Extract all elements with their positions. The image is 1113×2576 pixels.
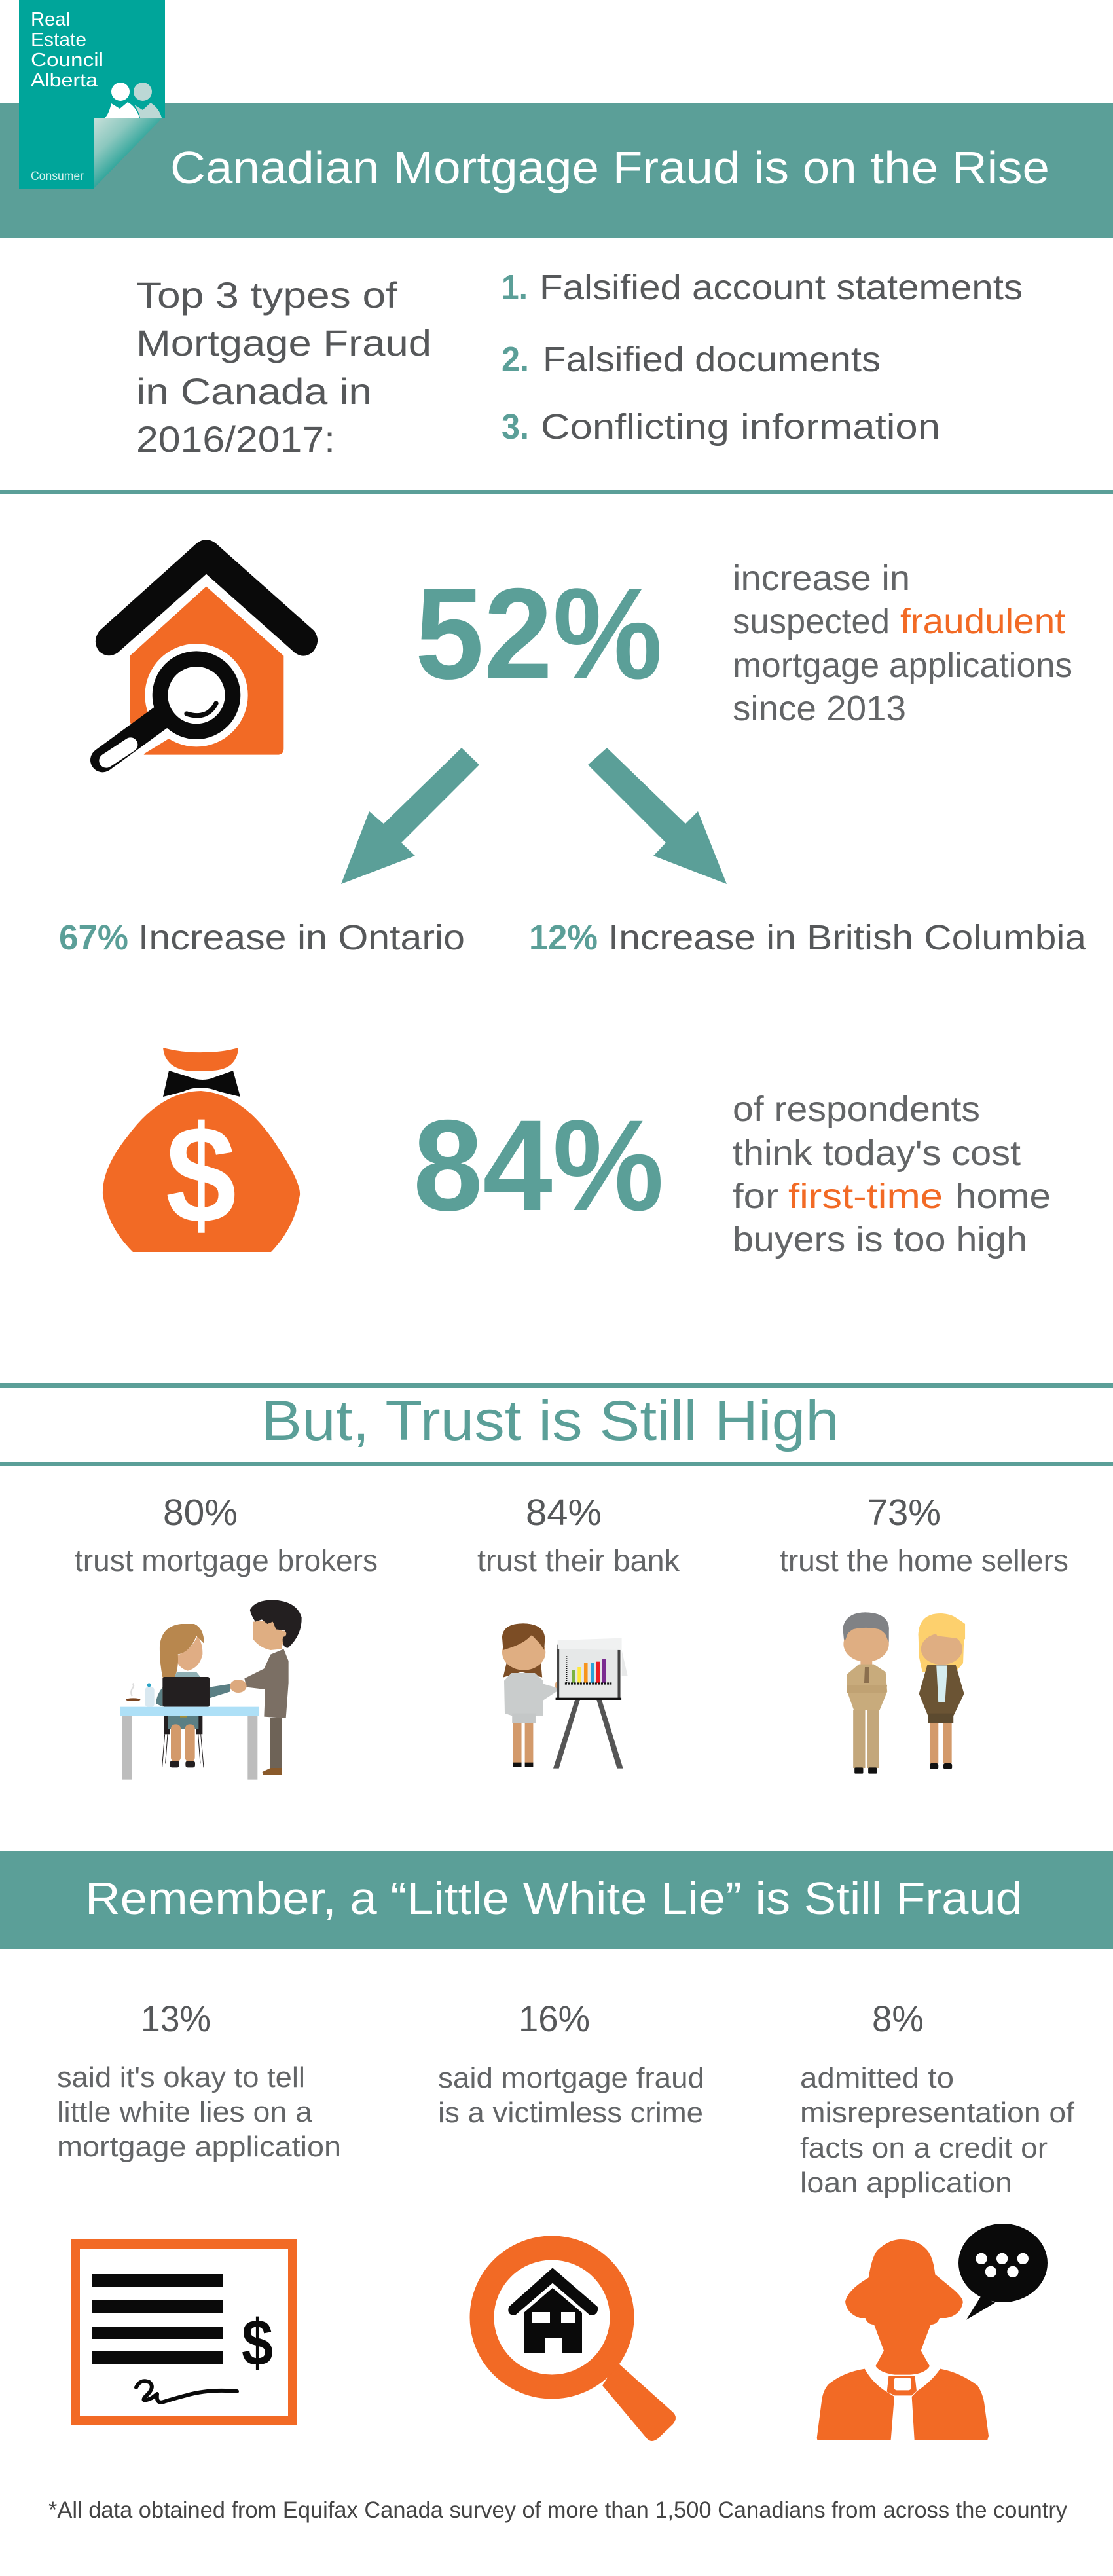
footnote: *All data obtained from Equifax Canada survey of more than 1,500 Canadians from across the country (48, 2497, 1067, 2523)
stat: 8% misrepresentation: loan application (800, 2167, 1012, 2199)
text: 52% description (733, 559, 1072, 728)
stat: trust the home sellers: trust the home sellers (780, 1543, 1068, 1577)
stat: 8% misrepresentation: facts on a credit or (800, 2132, 1048, 2164)
text block: top 3 types heading (136, 274, 431, 460)
logo: Real Estate Council Alberta: Estate (31, 29, 86, 50)
text: 52% description: fraudulent (900, 602, 1065, 641)
illustration: bank presenter with flip chart (502, 1623, 628, 1769)
stat: 52%: 52% (415, 561, 663, 706)
logo: Real Estate Council Alberta: Council (31, 50, 103, 71)
illustration: home sellers couple (843, 1612, 965, 1774)
stat: 8% misrepresentation: 8% (872, 1998, 924, 2039)
illustration: broker handshake at desk (120, 1600, 302, 1780)
text: 52% description: mortgage applications (733, 646, 1072, 685)
text: 84% description: of respondents (733, 1090, 980, 1129)
stat: 8% misrepresentation: admitted to (800, 2062, 954, 2094)
stat: trust their bank: 84% (526, 1492, 602, 1534)
stat: trust their bank (477, 1492, 680, 1577)
list: top 3 fraud types: 2. (502, 340, 529, 379)
stat: 84%: 84% (413, 1093, 664, 1238)
text block: top 3 types heading: Top 3 types of (136, 274, 397, 316)
icon: signed document (75, 2244, 293, 2421)
text: 84% description: home (955, 1177, 1051, 1216)
stat: 8% misrepresentation (800, 1998, 1075, 2199)
stat: trust their bank: trust their bank (477, 1543, 680, 1577)
stat: 16% victimless crime: said mortgage fraud (438, 2062, 704, 2094)
stat: trust the home sellers (780, 1492, 1068, 1577)
text block: top 3 types heading: in Canada in (136, 371, 372, 412)
list: top 3 fraud types: 1. (502, 268, 528, 307)
icon: signed document: $ (242, 2306, 273, 2380)
logo: Real Estate Council Alberta: Real (31, 9, 70, 30)
stat: 13% white lies: said it's okay to tell (57, 2061, 305, 2093)
text: 84% description: first-time (788, 1177, 943, 1216)
list: top 3 fraud types (502, 268, 1023, 447)
text: 84% description: think today's cost (733, 1133, 1021, 1173)
icon: money bag (103, 1048, 300, 1252)
stat: 13% white lies (57, 1998, 341, 2163)
stat: 13% white lies: 13% (141, 1998, 211, 2039)
arrow: to Ontario (341, 748, 479, 884)
arrow: to British Columbia (588, 748, 727, 884)
icon: money bag: $ (166, 1097, 236, 1252)
logo: Real Estate Council Alberta: Alberta (31, 70, 98, 91)
icon: house with magnifier (96, 540, 318, 761)
list: top 3 fraud types: 3. (502, 407, 529, 447)
header band (0, 103, 1113, 238)
logo: Real Estate Council Alberta (19, 0, 165, 189)
text block: top 3 types heading: Mortgage Fraud (136, 322, 431, 363)
icon: magnifying glass over house (482, 2248, 676, 2441)
stat: trust the home sellers: 73% (867, 1492, 941, 1534)
text: 52% description: increase in (733, 559, 910, 598)
logo: Real Estate Council Alberta: Consumer (31, 170, 84, 183)
stat: trust mortgage brokers: trust mortgage brokers (75, 1543, 378, 1577)
stat: 16% victimless crime: 16% (519, 1998, 590, 2039)
stat: 13% white lies: little white lies on a (57, 2096, 313, 2128)
stat: 13% white lies: mortgage application (57, 2131, 341, 2163)
text block: top 3 types heading: 2016/2017: (136, 418, 335, 460)
icon: person with speech bubble (817, 2224, 1048, 2440)
text: 84% description: for (733, 1177, 778, 1216)
heading: But, Trust is Still High: But, Trust is Still High (261, 1389, 839, 1452)
text: 52% description: suspected (733, 602, 890, 641)
stat: 16% victimless crime (438, 1998, 704, 2129)
stat: 12% British Columbia: 12% (529, 918, 598, 957)
stat: 8% misrepresentation: misrepresentation of (800, 2097, 1075, 2129)
title: Canadian Mortgage Fraud is on the Rise (170, 142, 1049, 193)
list: top 3 fraud types: Falsified documents (543, 340, 881, 379)
stat: 16% victimless crime: is a victimless crime (438, 2097, 703, 2129)
list: top 3 fraud types: Conflicting information (541, 407, 940, 447)
banner: Remember, a "Little White Lie" is Still Fraud: Remember, a “Little White Lie” is Still Fraud (85, 1873, 1023, 1924)
stat: 67% Ontario: 67% (59, 918, 128, 957)
stat: trust mortgage brokers (75, 1492, 378, 1577)
stat: 12% British Columbia: Increase in British Columbia (608, 918, 1087, 957)
stat: 67% Ontario: Increase in Ontario (138, 918, 465, 957)
banner: Remember, a "Little White Lie" is Still Fraud (0, 1851, 1113, 1949)
list: top 3 fraud types: Falsified account statements (539, 268, 1023, 307)
stat: trust mortgage brokers: 80% (163, 1492, 238, 1534)
text: 84% description: buyers is too high (733, 1220, 1027, 1259)
text: 52% description: since 2013 (733, 689, 906, 728)
text: 84% description (733, 1090, 1051, 1259)
